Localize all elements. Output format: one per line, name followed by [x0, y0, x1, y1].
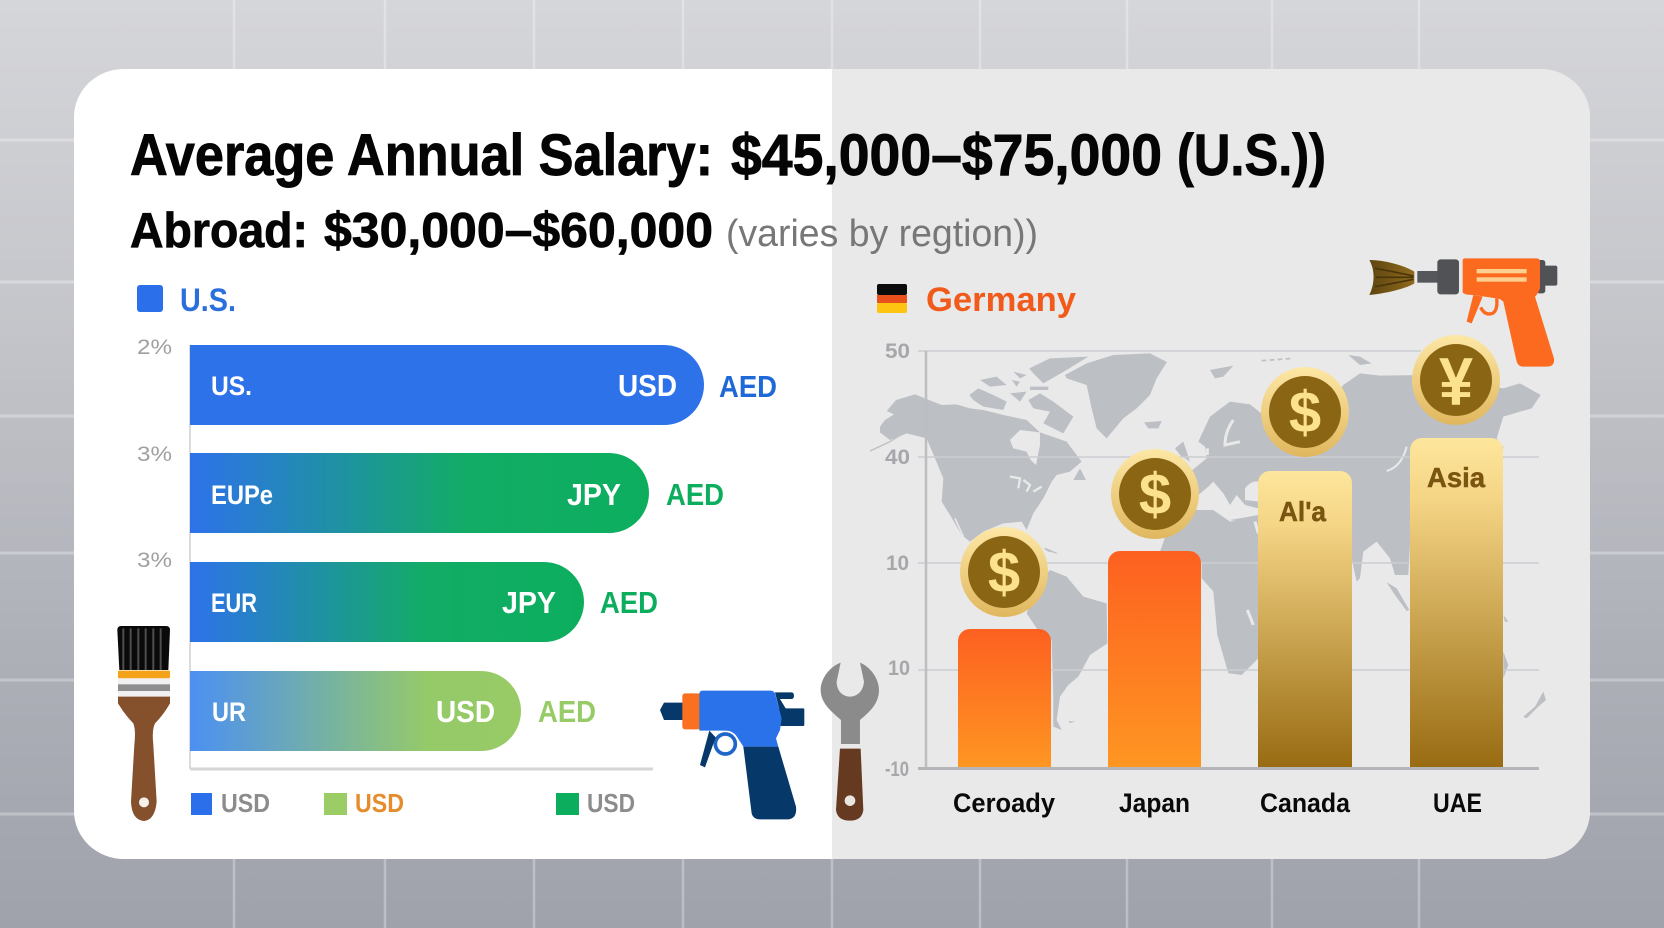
- column: UAE: [1410, 438, 1503, 768]
- main card: [74, 69, 1590, 859]
- bar: US: [190, 345, 777, 425]
- chart baseline: [918, 767, 1539, 770]
- U.S. heading: U.S.: [180, 282, 236, 318]
- percent axis labels: 2%: [137, 336, 172, 359]
- y axis labels: 50: [885, 340, 910, 363]
- column labels: UAE: [1433, 788, 1482, 818]
- column: UAE: Asia: [1427, 462, 1485, 493]
- y axis labels: -10: [885, 758, 909, 781]
- title: [130, 123, 1326, 188]
- percent axis labels: 3%: [137, 443, 172, 466]
- coin: dollar 3: $: [1289, 380, 1321, 445]
- coin: dollar 3: [1261, 367, 1349, 457]
- bar: UR: AED: [538, 694, 596, 729]
- bar: Europe: JPY: [567, 477, 621, 512]
- icon: German flag: [877, 284, 907, 313]
- map: South America: [1027, 548, 1107, 730]
- legend: USD: [355, 788, 404, 818]
- subtitle: [130, 204, 1038, 258]
- y axis labels: 40: [885, 446, 910, 469]
- panel: Germany column chart: [870, 281, 1546, 818]
- percent axis labels: 3%: [137, 549, 172, 572]
- bar: EUR: EUR: [211, 588, 257, 618]
- map: Americas north and Greenland: [870, 353, 1167, 553]
- subtitle: Abroad:: [130, 204, 308, 258]
- y axis: [925, 351, 927, 768]
- bar: Europe: [190, 453, 724, 533]
- column labels: Canada: [1260, 788, 1351, 818]
- column labels: [953, 788, 1482, 818]
- column: Canada: [1258, 471, 1352, 768]
- icon: orange spray gun with brush tip: [1369, 258, 1557, 367]
- legend: [191, 788, 635, 818]
- bar: UR: USD: [436, 694, 495, 729]
- Germany heading: Germany: [926, 281, 1076, 319]
- bar: EUR: [190, 562, 658, 642]
- bar: US: USD: [618, 368, 677, 403]
- coin: dollar 2: [1111, 449, 1199, 539]
- coin: dollar 1: $: [988, 540, 1020, 605]
- title: Average Annual Salary:: [130, 123, 713, 188]
- bar axes: [189, 345, 191, 769]
- U.S. heading: [137, 282, 236, 318]
- baseline: [190, 768, 653, 770]
- column: Germany: [958, 629, 1051, 768]
- gridlines: [918, 351, 1539, 670]
- column: Canada: Al'a: [1279, 496, 1326, 527]
- subtitle note: (varies by regtion)): [726, 213, 1038, 255]
- icon: blue spray gun: [660, 691, 804, 819]
- bar: EUR: JPY: [502, 585, 556, 620]
- percent axis labels: [137, 336, 172, 572]
- y axis labels: [885, 340, 910, 781]
- icon: paint brush: [117, 626, 170, 821]
- map: Eurasia, Africa and Oceania: [1144, 355, 1546, 718]
- coin: dollar 1: [960, 527, 1048, 617]
- bar: US: AED: [719, 369, 777, 404]
- bar: Europe: AED: [666, 477, 724, 512]
- y axis labels: 10: [886, 552, 909, 575]
- coin: dollar 2: $: [1139, 462, 1171, 527]
- subtitle: $30,000–$60,000: [324, 204, 713, 258]
- bar: EUR: AED: [600, 585, 658, 620]
- coin: yen: [1412, 335, 1500, 425]
- world map: [870, 353, 1546, 730]
- column labels: Ceroady: [953, 788, 1055, 818]
- title: $45,000–$75,000: [731, 123, 1162, 188]
- bar: Europe: EUPe: [211, 480, 273, 510]
- bar: UR: [190, 671, 596, 751]
- coin: yen: ¥: [1439, 344, 1473, 420]
- column labels: Japan: [1119, 788, 1190, 818]
- bar: UR: UR: [212, 697, 246, 727]
- legend: USD: [221, 788, 270, 818]
- title: (U.S.)): [1177, 123, 1326, 188]
- y axis labels: 10: [888, 657, 910, 680]
- column: Japan: [1108, 551, 1201, 768]
- bar: US: US.: [211, 371, 252, 401]
- icon: wrench: [821, 663, 879, 821]
- legend: USD: [587, 788, 635, 818]
- panel: U.S. horizontal bars: [137, 282, 777, 818]
